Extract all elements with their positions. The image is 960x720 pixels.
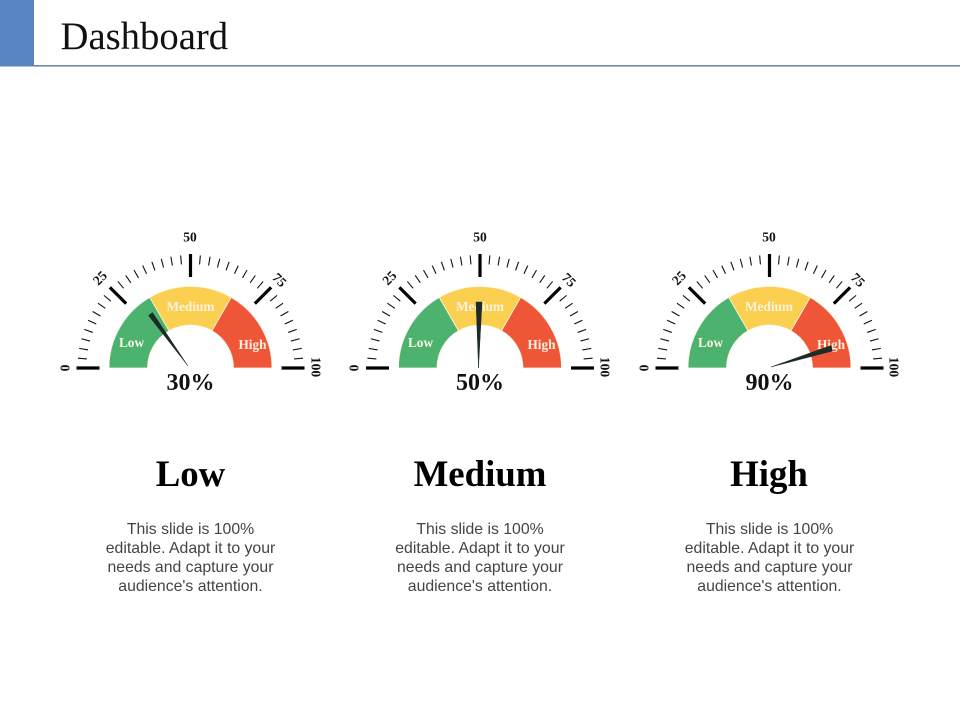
text block: high description: editable. Adapt it to your: [685, 540, 854, 557]
zone labels: Medium: [456, 299, 504, 314]
text block: high description: This slide is 100%: [706, 521, 833, 538]
percent value: 90%: [746, 370, 794, 396]
gauge colour bands: [398, 287, 562, 368]
scale labels: 50: [473, 230, 487, 244]
text block: low description: needs and capture your: [108, 559, 273, 576]
text block: medium description: [395, 521, 565, 595]
heading: Low: Low: [156, 453, 226, 494]
zone labels: [408, 299, 556, 352]
zone labels: High: [238, 337, 267, 352]
gauge ticks: [76, 254, 304, 368]
zone labels: Low: [408, 335, 433, 350]
header accent block: [0, 0, 34, 66]
scale labels: 50: [183, 230, 197, 244]
scale labels: 0: [346, 364, 362, 371]
zone labels: Medium: [166, 299, 215, 314]
text block: medium description: audience's attention.: [408, 578, 552, 595]
needle: [771, 346, 832, 367]
text block: low description: audience's attention.: [118, 578, 263, 595]
scale labels: 25: [90, 268, 110, 288]
header rule: [34, 65, 960, 67]
text block: high description: [685, 521, 854, 595]
zone labels: Low: [698, 335, 723, 350]
scale labels: 100: [886, 357, 902, 377]
zone labels: Medium: [745, 299, 793, 314]
scale labels: 75: [269, 270, 290, 290]
text block: low description: This slide is 100%: [127, 521, 254, 538]
gauge: high 90%: [636, 230, 902, 396]
title: Dashboard: [60, 16, 228, 58]
scale labels: 100: [598, 357, 612, 377]
gauge: low 30%: [58, 230, 324, 396]
heading: High: High: [730, 453, 808, 494]
text block: low description: [106, 521, 275, 595]
percent value: 30%: [166, 370, 214, 396]
zone labels: [119, 299, 267, 352]
scale labels: [58, 230, 324, 377]
text block: medium description: This slide is 100%: [416, 521, 544, 538]
scale labels: 25: [669, 268, 689, 288]
heading: Medium: Medium: [414, 453, 547, 494]
scale labels: 100: [308, 357, 324, 377]
gauge colour bands: [688, 287, 851, 368]
text block: medium description: needs and capture your: [397, 559, 563, 576]
gauge colour bands: [109, 287, 272, 368]
gauge ticks: [656, 254, 884, 368]
zone labels: High: [817, 337, 846, 352]
percent value: 50%: [456, 370, 504, 396]
text block: high description: audience's attention.: [697, 578, 842, 595]
scale labels: 75: [559, 270, 579, 290]
zone labels: [698, 299, 846, 352]
text block: high description: needs and capture your: [687, 559, 852, 576]
zone labels: High: [527, 337, 556, 352]
text block: low description: editable. Adapt it to your: [106, 540, 275, 557]
needle: [148, 312, 188, 366]
gauge ticks: [366, 254, 594, 368]
scale labels: 0: [58, 364, 72, 371]
scale labels: [636, 230, 902, 377]
scale labels: 50: [762, 230, 776, 244]
scale labels: 75: [848, 270, 868, 290]
scale labels: 25: [379, 268, 400, 288]
needle: [476, 302, 482, 368]
text block: medium description: editable. Adapt it to your: [395, 540, 565, 557]
scale labels: [346, 230, 612, 377]
gauge: medium 50%: [346, 230, 612, 396]
zone labels: Low: [119, 335, 144, 350]
scale labels: 0: [636, 364, 652, 371]
